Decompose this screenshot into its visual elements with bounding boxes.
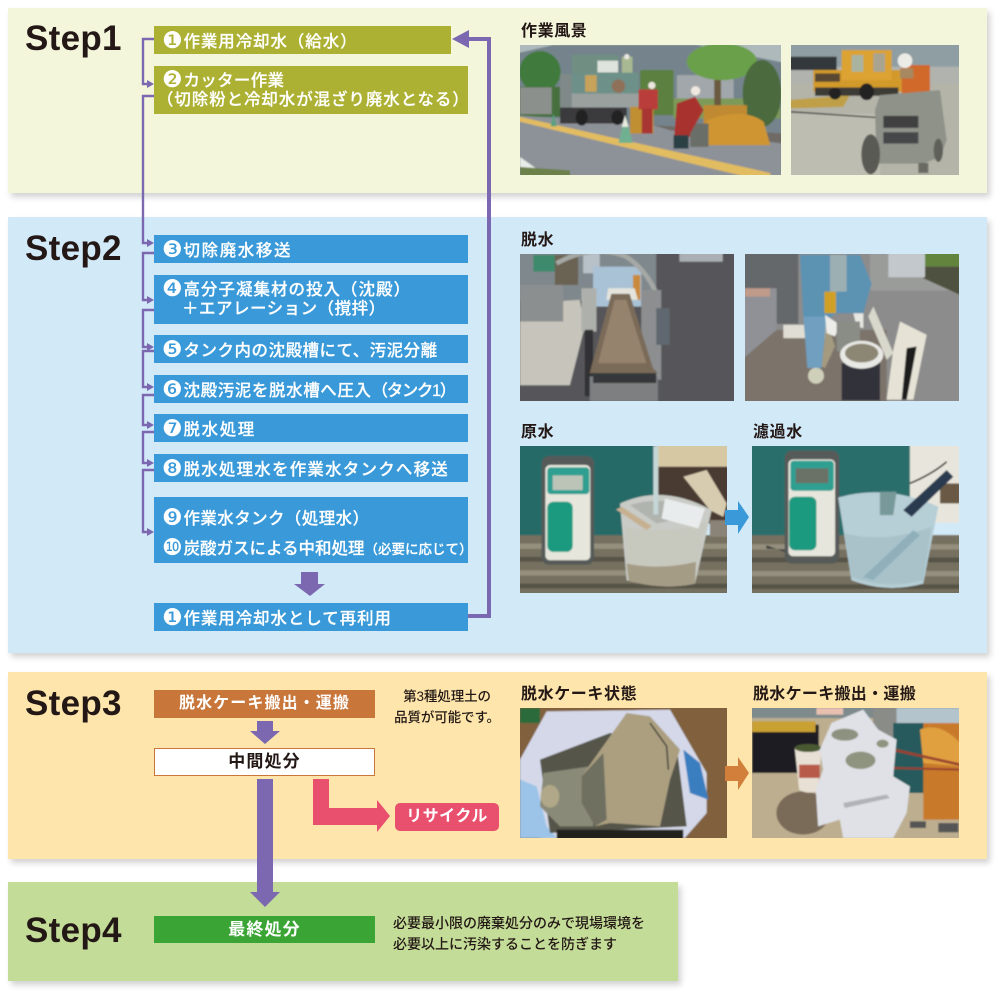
box: step 4 polymer flocculant: [154, 275, 468, 324]
panel: Step 4 background: [8, 882, 678, 981]
note: minimal disposal statement: 必要以上に汚染することを防ぎます: [393, 936, 617, 952]
box: recycling: [395, 803, 499, 831]
photo: cutter machine with operator: [791, 45, 959, 175]
box: step 1 cooling water supply: [154, 26, 451, 54]
note: minimal disposal statement: [393, 915, 645, 952]
box: reuse as cooling water: 作業用冷却水として再利用: [184, 610, 392, 628]
panel: Step 2 background: [8, 217, 987, 653]
panel: Step 3 background: [8, 672, 987, 859]
box: intermediate disposal: [154, 748, 375, 776]
note: minimal disposal statement: 必要最小限の廃棄処分のみで現場環境を: [393, 915, 645, 931]
heading: Step2: Step2: [25, 229, 122, 268]
box: step 5 sludge separation: ❺: [162, 337, 183, 363]
box: step 8 transfer to work water tank: [154, 454, 468, 482]
note: soil quality: 第3種処理土の: [403, 689, 491, 704]
box: reuse as cooling water: ❶: [162, 605, 183, 631]
arrow: intermediate disposal to recycling: [313, 779, 390, 832]
box: step 5 sludge separation: タンク内の沈殿槽にて、汚泥分離: [184, 342, 438, 360]
box: step 4 polymer flocculant: ＋エアレーション（撹拌）: [182, 300, 386, 318]
box: steps 9 and 10 tank and neutralization: ❿: [162, 535, 183, 561]
panel: Step 1 background: [8, 8, 987, 193]
box: step 7 dewatering: 脱水処理: [184, 421, 256, 439]
arrow: transport to intermediate disposal: [250, 721, 280, 744]
label: dewatered cake transport: 脱水ケーキ搬出・運搬: [753, 686, 916, 703]
arrow: cake condition to transport: [725, 757, 749, 790]
box: step 6 pressure into dewatering tank: ❻: [162, 377, 183, 403]
box: step 6 pressure into dewatering tank: [154, 375, 468, 403]
box: step 2 cutter work: [154, 66, 468, 114]
arrow: intermediate disposal to final disposal: [250, 779, 280, 907]
box: step 8 transfer to work water tank: 脱水処理水を作業水タンクへ移送: [184, 461, 449, 479]
box: dewatered cake transport: 脱水ケーキ搬出・運搬: [179, 695, 350, 712]
label: dewatering: 脱水: [521, 232, 554, 249]
box: step 8 transfer to work water tank: ❽: [162, 456, 183, 482]
photo: dewatering tray: [520, 254, 734, 401]
label: filtered water: 濾過水: [753, 424, 803, 441]
photo: filtered water with pH meter: [752, 446, 959, 593]
box: step 5 sludge separation: [154, 335, 468, 363]
label: dewatered cake condition: 脱水ケーキ状態: [521, 686, 637, 703]
note: soil quality: [394, 689, 500, 725]
box: steps 9 and 10 tank and neutralization: 炭酸ガスによる中和処理（必要に応じて）: [184, 540, 473, 558]
box: steps 9 and 10 tank and neutralization: ❾: [162, 505, 183, 531]
box: step 7 dewatering: ❼: [162, 416, 183, 442]
photo: operator handling dewatered cake: [745, 254, 959, 401]
note: soil quality: 品質が可能です。: [394, 710, 500, 725]
box: step 6 pressure into dewatering tank: 沈殿汚泥を脱水槽へ圧入（タンク1）: [184, 382, 455, 400]
box: step 3 waste water transfer: ❸: [162, 237, 183, 263]
box: step 3 waste water transfer: 切除廃水移送: [184, 242, 292, 260]
photo: sacks of dewatered cake: [752, 708, 959, 838]
box: step 2 cutter work: カッター作業: [184, 72, 284, 90]
box: step 1 cooling water supply: ❶: [162, 28, 183, 54]
box: dewatered cake transport: [154, 690, 375, 718]
box: recycling: リサイクル: [406, 808, 488, 825]
label: work scene: 作業風景: [521, 23, 587, 40]
box: step 4 polymer flocculant: ❹: [162, 276, 183, 302]
heading: Step1: Step1: [25, 19, 122, 58]
box: step 4 polymer flocculant: 高分子凝集材の投入（沈殿）: [184, 281, 411, 299]
box: step 1 cooling water supply: 作業用冷却水（給水）: [184, 33, 358, 51]
photo: road cutting work with truck: [520, 45, 781, 175]
box: intermediate disposal: 中間処分: [228, 752, 301, 771]
box: steps 9 and 10 tank and neutralization: [154, 497, 468, 563]
arrow: raw water to filtered water: [725, 501, 749, 534]
box: step 2 cutter work: （切除粉と冷却水が混ざり廃水となる）: [157, 91, 470, 109]
box: step 7 dewatering: [154, 414, 468, 442]
box: final disposal: 最終処分: [228, 920, 301, 939]
photo: dewatered cake in bag: [520, 708, 727, 838]
box: reuse as cooling water: [154, 603, 468, 631]
box: final disposal: [154, 916, 375, 943]
heading: Step3: Step3: [25, 684, 122, 723]
box: step 2 cutter work: ❷: [162, 67, 183, 93]
box: step 3 waste water transfer: [154, 235, 468, 263]
heading: Step4: Step4: [25, 911, 122, 950]
box: steps 9 and 10 tank and neutralization: 作業水タンク（処理水）: [184, 510, 369, 528]
photo: raw water with pH meter: [520, 446, 727, 593]
label: raw water: 原水: [521, 424, 554, 441]
